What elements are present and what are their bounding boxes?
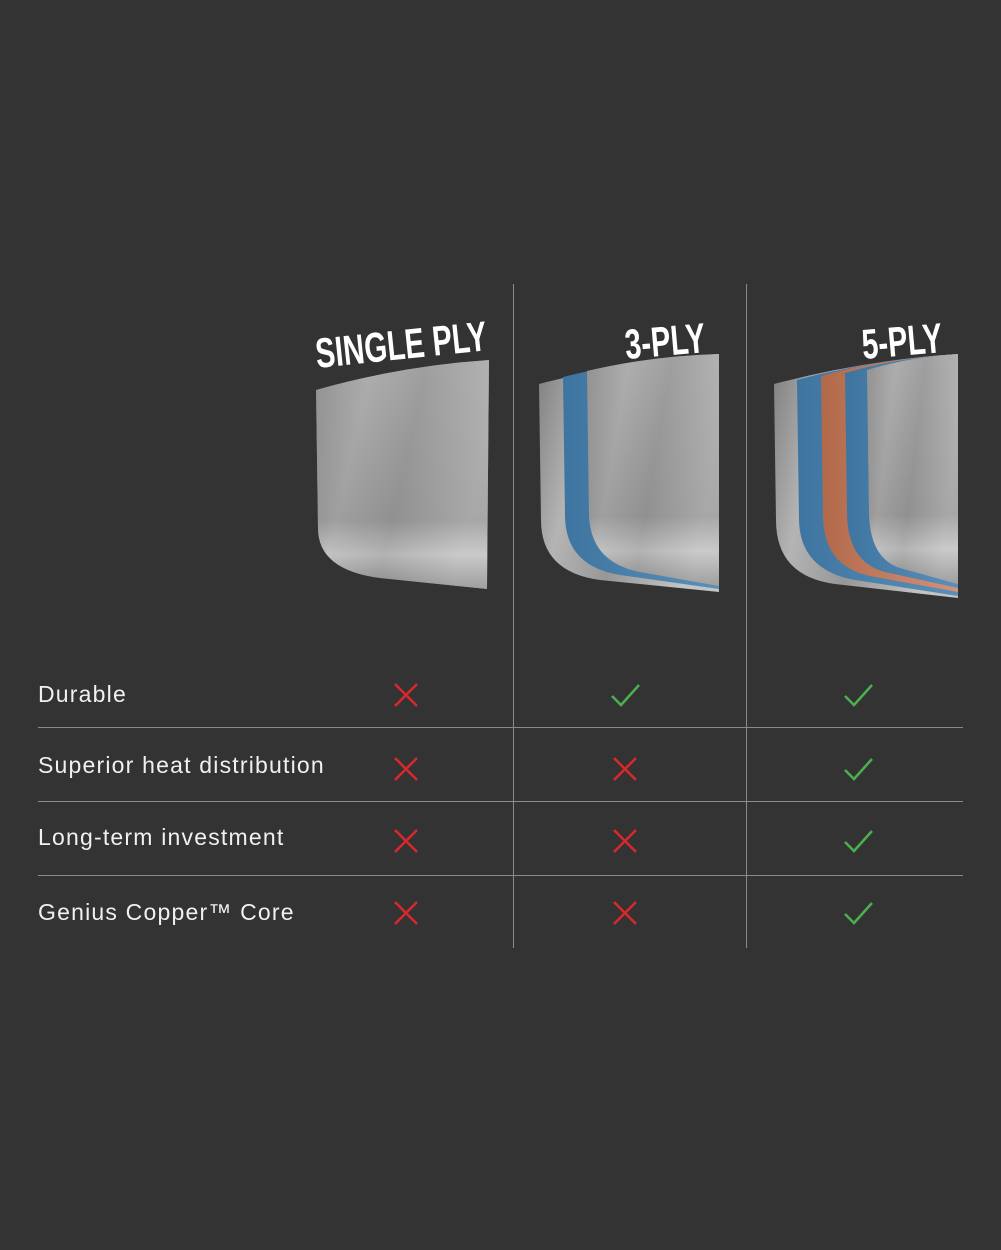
marks: row 3 xyxy=(395,830,872,852)
title: 5-ply: 5-PLY xyxy=(860,314,944,368)
row label: durable: Durable xyxy=(38,681,127,707)
pan: 3-ply xyxy=(539,354,719,592)
title: single ply: SINGLE PLY xyxy=(313,312,489,377)
row label: copper: Genius Copper™ Core xyxy=(38,899,295,925)
row label: investment: Long-term investment xyxy=(38,824,284,850)
marks: row 1 xyxy=(395,684,872,706)
marks: row 4 xyxy=(395,902,872,924)
grid lines xyxy=(38,284,963,948)
title: 3-ply: 3-PLY xyxy=(623,314,707,368)
pan: 5-ply xyxy=(774,354,958,598)
pan: single ply xyxy=(316,360,489,589)
row label: heat: Superior heat distribution xyxy=(38,752,325,778)
marks: row 2 xyxy=(395,758,872,780)
